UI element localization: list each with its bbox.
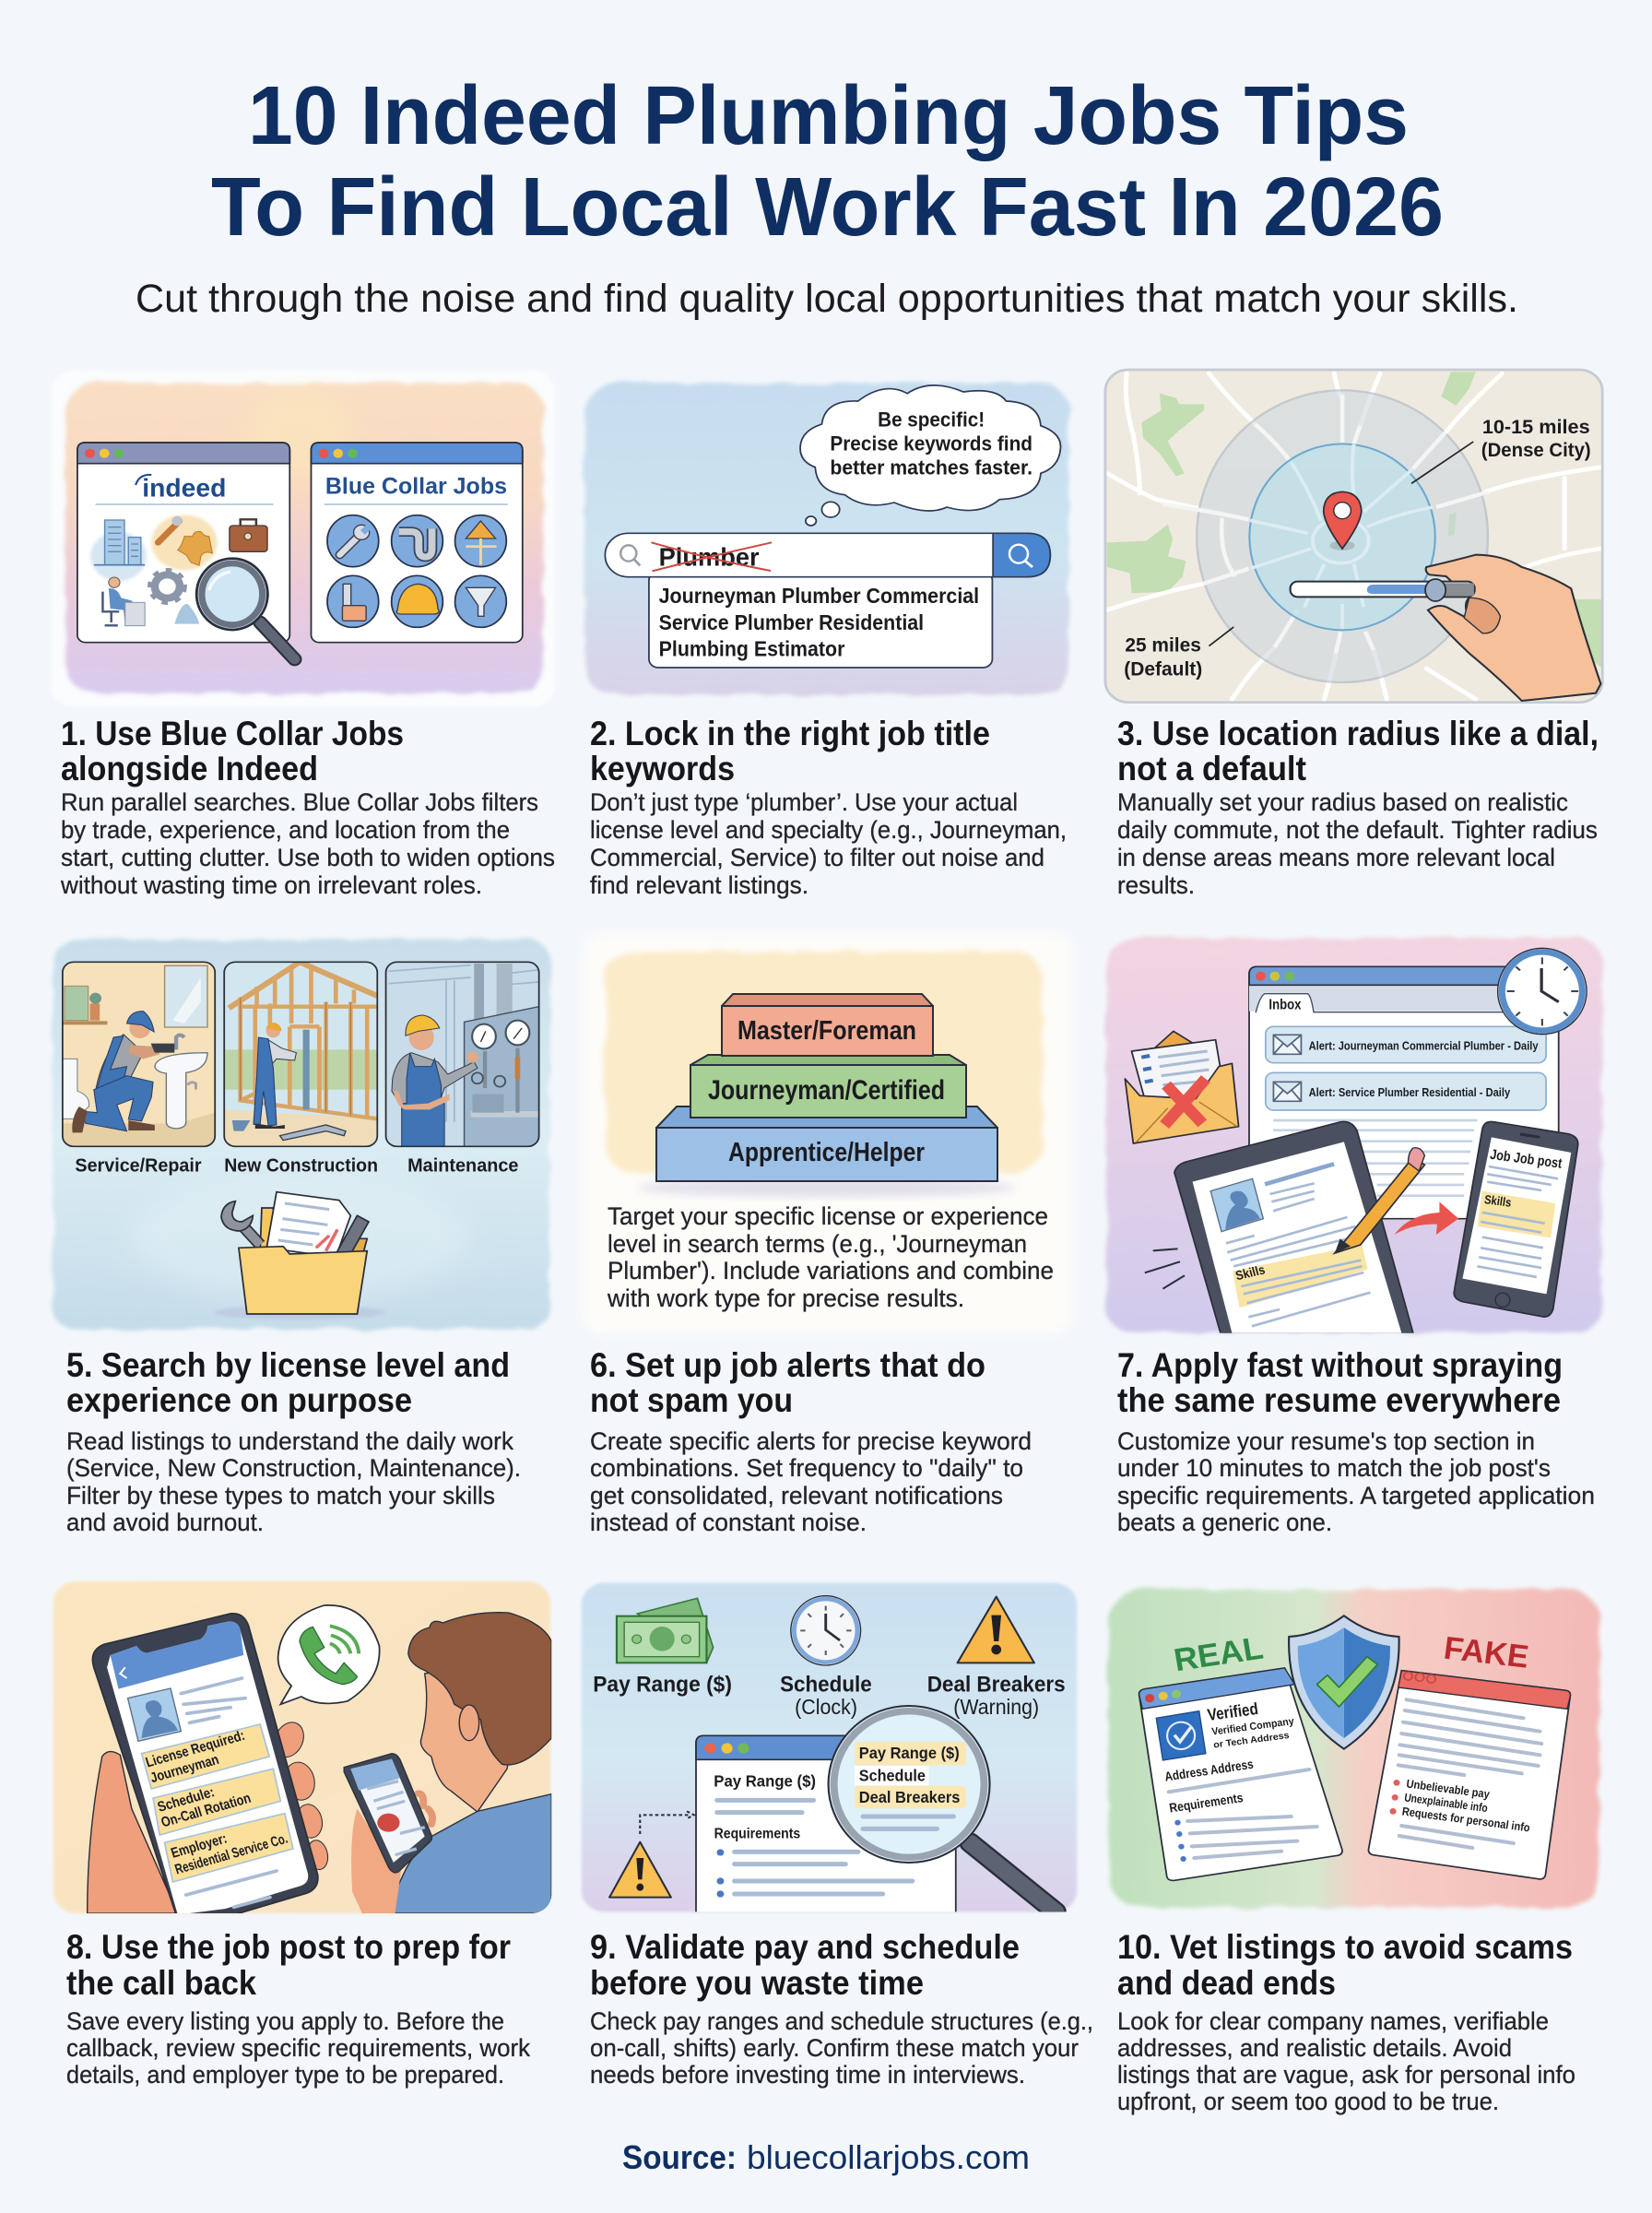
map labels: 10-15 miles	[1482, 416, 1590, 438]
source line: Source:	[622, 2138, 737, 2176]
heading: tip 7	[1117, 1346, 1563, 1419]
text: tip 6 body: get consolidated, relevant notifications	[590, 1482, 1003, 1509]
heading: tip 9: 9. Validate pay and schedule	[590, 1928, 1020, 1966]
panel: tip 1 illustration	[51, 371, 555, 707]
icon: clock	[1498, 948, 1587, 1035]
speech bubble: phone call	[278, 1605, 380, 1704]
text: tip 2 body: Don’t just type ‘plumber’. Use your actual	[590, 788, 1018, 816]
device: tablet with resume: Skills	[1234, 1263, 1267, 1284]
text: tip 10 body: Look for clear company names, verifiable	[1117, 2007, 1549, 2035]
device: phone with job post: Skills	[1483, 1192, 1513, 1210]
pyramid: apprentice tier	[638, 1106, 1016, 1197]
text: tip 1 body: without wasting time on irrelevant roles.	[60, 871, 482, 899]
browser window: fake listing: Unbelievable pay	[1406, 1777, 1491, 1801]
text: tip 3 body: in dense areas means more relevant local	[1117, 844, 1555, 871]
panel: tip 5 illustration	[53, 939, 549, 1330]
text: tip 6 body: instead of constant noise.	[590, 1509, 867, 1536]
map labels	[1124, 416, 1591, 680]
browser window: job post: Pay Range ($)	[714, 1771, 816, 1791]
search bar: Plumber	[659, 543, 760, 572]
browser window: inbox: Inbox	[1268, 998, 1302, 1012]
map labels: (Dense City)	[1481, 439, 1591, 461]
heading: tip 5: 5. Search by license level and	[66, 1346, 510, 1384]
browser window: indeed	[77, 443, 289, 643]
heading: tip 8	[66, 1928, 511, 2002]
thought bubble: Be specific!	[878, 408, 985, 431]
heading: tip 2: 2. Lock in the right job title	[590, 715, 990, 752]
scene labels	[75, 1155, 518, 1176]
text: tip 2 body	[590, 788, 1067, 899]
heading: tip 1	[61, 715, 404, 787]
browser window: real listing: or Tech Address	[1213, 1731, 1290, 1751]
thought bubble: Precise keywords find	[830, 432, 1032, 455]
text: tip 10 body: listings that are vague, ask for personal info	[1117, 2061, 1575, 2089]
browser window: job post: Requirements	[714, 1827, 800, 1842]
text: tip 7 body: beats a generic one.	[1117, 1509, 1332, 1536]
panel: tip 9 illustration	[582, 1583, 1077, 1913]
text: tip 8 body	[66, 2007, 530, 2089]
text: tip 10 body	[1117, 2007, 1575, 2115]
text: tip 9 body	[590, 2007, 1093, 2089]
text: tip 3 body: Manually set your radius based on realistic	[1117, 788, 1568, 816]
slider	[1291, 579, 1475, 601]
browser window: real listing: Requirements	[1168, 1791, 1245, 1816]
heading: tip 5	[66, 1346, 510, 1419]
browser window: real listing: Address Address	[1163, 1757, 1255, 1784]
text: tip 5 body: Read listings to understand the daily work	[66, 1427, 513, 1455]
heading: tip 9: before you waste time	[590, 1964, 924, 2002]
text: tier caption	[607, 1202, 1054, 1312]
map labels: (Default)	[1124, 657, 1202, 680]
icon: hand on slider	[1426, 555, 1600, 701]
text: tip 7 body: under 10 minutes to match the job post's	[1117, 1454, 1551, 1482]
icon: warning triangle	[958, 1597, 1034, 1663]
browser window: job post	[696, 1735, 956, 1913]
scene labels: Maintenance	[407, 1155, 518, 1176]
source line: bluecollarjobs.com	[747, 2138, 1030, 2176]
scene: maintenance	[386, 962, 539, 1146]
panel: tip 8 illustration	[53, 1581, 551, 1915]
heading: tip 1: alongside Indeed	[61, 750, 318, 787]
subtitle: Cut through the noise and find quality local opportunities that match your skills.	[136, 277, 1518, 321]
browser window: real listing: Verified	[1206, 1699, 1259, 1724]
text: tier caption: with work type for precise results.	[607, 1284, 964, 1312]
text: tip 8 body: details, and employer type to be prepared.	[66, 2061, 504, 2089]
dropdown suggestions: Plumbing Estimator	[659, 637, 844, 660]
icon: money	[617, 1598, 714, 1663]
device: phone with job post: Employer:	[170, 1831, 229, 1862]
heading: tip 3	[1117, 715, 1599, 787]
device: phone with job post	[1454, 1121, 1578, 1317]
text: tip 5 body: Filter by these types to match your skills	[66, 1482, 495, 1509]
text: tier caption: Plumber'). Include variations and combine	[608, 1257, 1054, 1284]
map labels: 25 miles	[1125, 633, 1201, 656]
panel: tip 6 illustration	[583, 933, 1073, 1333]
device: phone with job post: License Required:	[144, 1728, 247, 1770]
source line	[622, 2138, 1030, 2176]
label: fake: FAKE	[1442, 1629, 1531, 1675]
icon: motion lines	[1145, 1249, 1185, 1289]
heading: tip 10: 10. Vet listings to avoid scams	[1117, 1928, 1573, 1966]
text: tip 6 body: combinations. Set frequency to "daily" to	[590, 1454, 1023, 1482]
text: tip 5 body: (Service, New Construction, Maintenance).	[66, 1454, 521, 1482]
heading: tip 7: the same resume everywhere	[1117, 1381, 1561, 1419]
scene: service and repair	[63, 962, 215, 1146]
text: tip 7 body: Customize your resume's top section in	[1117, 1427, 1535, 1455]
text: tip 9 body: needs before investing time in interviews.	[590, 2061, 1025, 2089]
heading: tip 1: 1. Use Blue Collar Jobs	[61, 715, 404, 752]
text: tip 8 body: callback, review specific requirements, work	[66, 2034, 530, 2062]
arrow: warning to job post	[640, 1811, 694, 1834]
device: phone with job post: Job Job post	[1489, 1147, 1564, 1172]
text: tier caption: Target your specific license or experience	[608, 1202, 1048, 1230]
thought bubble: better matches faster.	[830, 456, 1032, 479]
text: tip 9 body: on-call, shifts) early. Confirm these match your	[590, 2034, 1079, 2062]
browser window: fake listing: Unexplainable info	[1403, 1791, 1489, 1815]
browser window: fake listing: Requests for personal info	[1401, 1805, 1531, 1834]
browser window: fake listing	[1368, 1671, 1570, 1879]
text: tier caption: level in search terms (e.g., 'Journeyman	[608, 1230, 1027, 1258]
icon: envelope with red x	[1125, 1031, 1239, 1143]
text: tip 1 body	[60, 788, 555, 899]
text: tip 10 body: addresses, and realistic details. Avoid	[1117, 2034, 1512, 2062]
label: real: REAL	[1171, 1629, 1266, 1678]
hand holding main phone	[88, 1719, 330, 1913]
arrow: resume to job post	[1394, 1201, 1458, 1235]
panel: tip 10 illustration	[1108, 1589, 1599, 1907]
heading: tip 10: and dead ends	[1117, 1964, 1336, 2002]
icon: magnifying glass	[196, 559, 295, 659]
panel: tip 7 illustration	[1106, 938, 1601, 1333]
browser window: real listing: Verified Company	[1211, 1715, 1295, 1738]
browser window: indeed: indeed	[142, 474, 226, 503]
text: tip 7 body: specific requirements. A targeted application	[1117, 1482, 1595, 1509]
dropdown suggestions: Journeyman Plumber Commercial	[659, 585, 979, 608]
text: tip 1 body: Run parallel searches. Blue Collar Jobs filters	[61, 788, 538, 816]
text: tip 2 body: license level and specialty (e.g., Journeyman,	[590, 816, 1067, 844]
device: phone with job post: On-Call Rotation	[159, 1791, 253, 1830]
icon: folder with tools	[214, 1192, 385, 1320]
pyramid: apprentice tier: Apprentice/Helper	[728, 1138, 925, 1167]
icon labels	[593, 1672, 1066, 1719]
icon labels: Schedule	[780, 1672, 872, 1697]
text: tip 8 body: Save every listing you apply to. Before the	[66, 2007, 504, 2035]
scene labels: Service/Repair	[75, 1155, 202, 1176]
icon: clock	[791, 1596, 861, 1665]
panel: tip 3 map illustration	[1105, 370, 1602, 703]
man with phone	[344, 1613, 551, 1913]
heading: tip 6	[590, 1346, 985, 1419]
text: tip 2 body: find relevant listings.	[590, 871, 808, 899]
browser window: blue collar jobs: Blue Collar Jobs	[325, 473, 507, 499]
heading: tip 7: 7. Apply fast without spraying	[1117, 1346, 1563, 1384]
heading: tip 8: the call back	[66, 1964, 256, 2002]
heading: tip 9	[590, 1928, 1020, 2002]
scene: new construction	[224, 962, 377, 1146]
title	[211, 70, 1444, 254]
device: phone with job post: Residential Service Co.	[173, 1831, 289, 1877]
text: tip 3 body	[1117, 788, 1598, 899]
icon: magnifying glass with highlights: Schedule	[859, 1766, 926, 1785]
device: phone with job post: Schedule:	[156, 1785, 217, 1816]
icon: pencil	[1335, 1148, 1424, 1253]
text: tip 10 body: upfront, or seem too good to be true.	[1117, 2088, 1499, 2115]
pyramid: master tier	[722, 994, 933, 1056]
heading: tip 2: keywords	[590, 750, 735, 787]
heading: tip 6: not spam you	[590, 1381, 793, 1419]
title: 10 Indeed Plumbing Jobs Tips	[248, 70, 1409, 162]
icon: magnifying glass with highlights	[829, 1706, 1056, 1911]
browser window: inbox	[1249, 966, 1559, 1219]
text: tip 1 body: by trade, experience, and location from the	[61, 816, 510, 844]
icon labels: Deal Breakers	[927, 1672, 1066, 1697]
pyramid: journeyman tier	[690, 1055, 966, 1118]
device: tablet with resume	[1174, 1121, 1413, 1333]
text: tip 3 body: daily commute, not the default. Tighter radius	[1117, 816, 1598, 844]
dropdown suggestions: Service Plumber Residential	[659, 611, 924, 634]
text: tip 5 body	[66, 1427, 521, 1536]
heading: tip 10	[1117, 1928, 1573, 2002]
text: tip 1 body: start, cutting clutter. Use both to widen options	[61, 844, 555, 871]
browser window: real listing	[1139, 1668, 1342, 1880]
device: phone with job post	[92, 1614, 318, 1915]
heading: tip 6: 6. Set up job alerts that do	[590, 1346, 985, 1384]
thought bubble	[800, 385, 1060, 526]
icon: magnifying glass with highlights: Pay Range ($)	[859, 1744, 960, 1762]
title: To Find Local Work Fast In 2026	[211, 161, 1444, 254]
device: phone with job post: Journeyman	[148, 1752, 221, 1786]
heading: tip 3: not a default	[1117, 750, 1306, 787]
heading: tip 5: experience on purpose	[66, 1381, 412, 1419]
browser window: inbox: Alert: Service Plumber Residential - Daily	[1309, 1085, 1511, 1099]
panel: tip 2 illustration	[584, 383, 1068, 694]
text: tip 6 body	[590, 1427, 1032, 1536]
text: tip 5 body: and avoid burnout.	[66, 1509, 264, 1536]
icon: location pin	[1324, 491, 1362, 550]
browser window: inbox: Alert: Journeyman Commercial Plumber - Daily	[1309, 1039, 1539, 1052]
heading: tip 2	[590, 715, 990, 787]
heading: tip 8: 8. Use the job post to prep for	[66, 1928, 511, 1966]
text: tip 2 body: Commercial, Service) to filter out noise and	[590, 844, 1044, 871]
scene labels: New Construction	[224, 1155, 378, 1176]
browser window: blue collar jobs	[311, 443, 523, 643]
text: tip 9 body: Check pay ranges and schedule structures (e.g.,	[590, 2007, 1093, 2035]
dropdown suggestions	[649, 572, 992, 668]
icon labels: (Warning)	[953, 1696, 1039, 1719]
icon: magnifying glass with highlights: Deal Breakers	[859, 1788, 960, 1806]
icon: small warning triangle	[609, 1842, 671, 1898]
heading: tip 3: 3. Use location radius like a dial,	[1117, 715, 1599, 752]
pyramid: journeyman tier: Journeyman/Certified	[708, 1075, 945, 1106]
text: tip 7 body	[1117, 1427, 1595, 1536]
text: tip 3 body: results.	[1117, 871, 1195, 899]
text: tip 6 body: Create specific alerts for precise keyword	[590, 1427, 1032, 1455]
icon labels: Pay Range ($)	[593, 1672, 732, 1697]
search bar	[605, 533, 1050, 577]
pyramid: master tier: Master/Foreman	[738, 1016, 916, 1046]
icon labels: (Clock)	[795, 1696, 857, 1719]
icon: shield with check	[1289, 1615, 1399, 1749]
